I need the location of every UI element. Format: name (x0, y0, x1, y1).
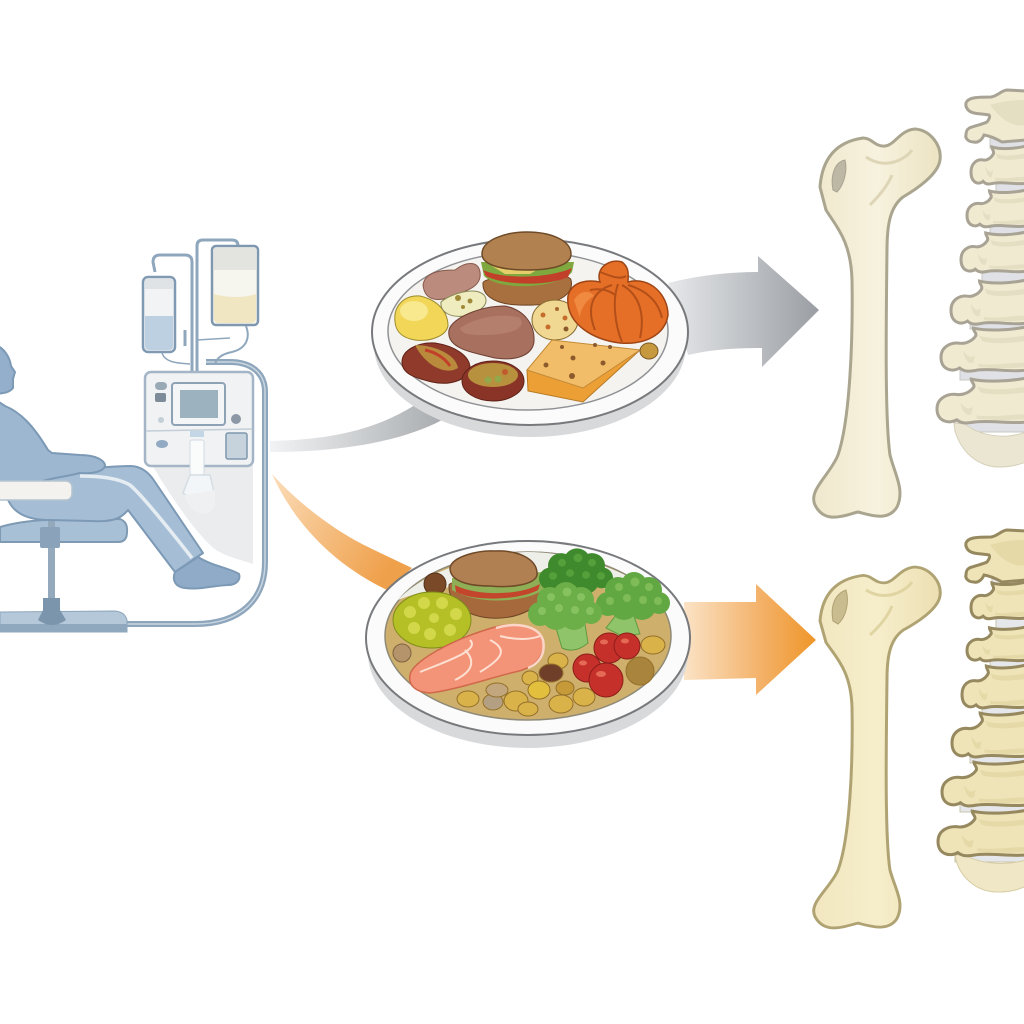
top femur (814, 129, 940, 517)
vertebrae (938, 530, 1024, 856)
vertebra shading (961, 540, 1024, 853)
cookie (532, 300, 578, 340)
sacrum cap (955, 855, 1024, 892)
sacrum cap (954, 423, 1024, 467)
ham slice (423, 264, 480, 299)
bottom femur (814, 567, 940, 928)
bottom plate: healthy food (366, 541, 690, 748)
burger (481, 232, 574, 305)
nut by burger (424, 573, 446, 595)
vertebra shading (960, 100, 1024, 420)
red patty left (402, 343, 470, 383)
head (0, 345, 15, 394)
vertebrae (937, 90, 1024, 423)
chair base (0, 598, 127, 632)
leg stripe (80, 476, 192, 558)
femur pit (832, 590, 847, 624)
nut (640, 343, 658, 359)
broccoli centre (528, 582, 602, 650)
chair pole and joint (40, 500, 60, 600)
machine lower cabinet (152, 465, 253, 564)
armrest (0, 481, 72, 500)
curved orange tail arrow (272, 474, 412, 590)
salmon fillet (410, 625, 544, 693)
orange arrow to bone (684, 584, 816, 695)
cheese block (527, 340, 640, 402)
plate (372, 239, 688, 437)
broccoli top (539, 548, 613, 594)
foot (174, 557, 239, 589)
green cauliflower (393, 592, 471, 648)
patient figure (0, 345, 239, 589)
orange squash (568, 261, 668, 343)
grey arrow to bone (668, 256, 819, 367)
patient dialysis scene (0, 240, 265, 632)
femur pit (832, 160, 846, 192)
iv pole and lines (153, 240, 248, 372)
potato slice (395, 296, 448, 340)
plate (366, 541, 690, 748)
steak (449, 306, 534, 359)
burger (449, 551, 544, 618)
broccoli right (596, 572, 670, 636)
tomatoes (573, 633, 640, 697)
top spine (937, 90, 1024, 467)
discs (955, 576, 1024, 862)
chickpeas and nuts (457, 636, 665, 716)
top plate: processed food (372, 232, 688, 437)
leg (8, 466, 203, 572)
red patty right (462, 361, 524, 401)
curved grey tail arrow (270, 405, 442, 452)
torso (0, 400, 105, 486)
blood tube loop (125, 362, 265, 624)
bottom spine (938, 530, 1024, 892)
discs (955, 138, 1024, 432)
chair seat (0, 519, 127, 542)
iv bag small (143, 277, 175, 352)
collection bag (183, 440, 215, 514)
iv bag large (212, 246, 258, 325)
small nut (393, 644, 411, 662)
dialysis machine (145, 372, 253, 466)
small patty (441, 291, 486, 316)
